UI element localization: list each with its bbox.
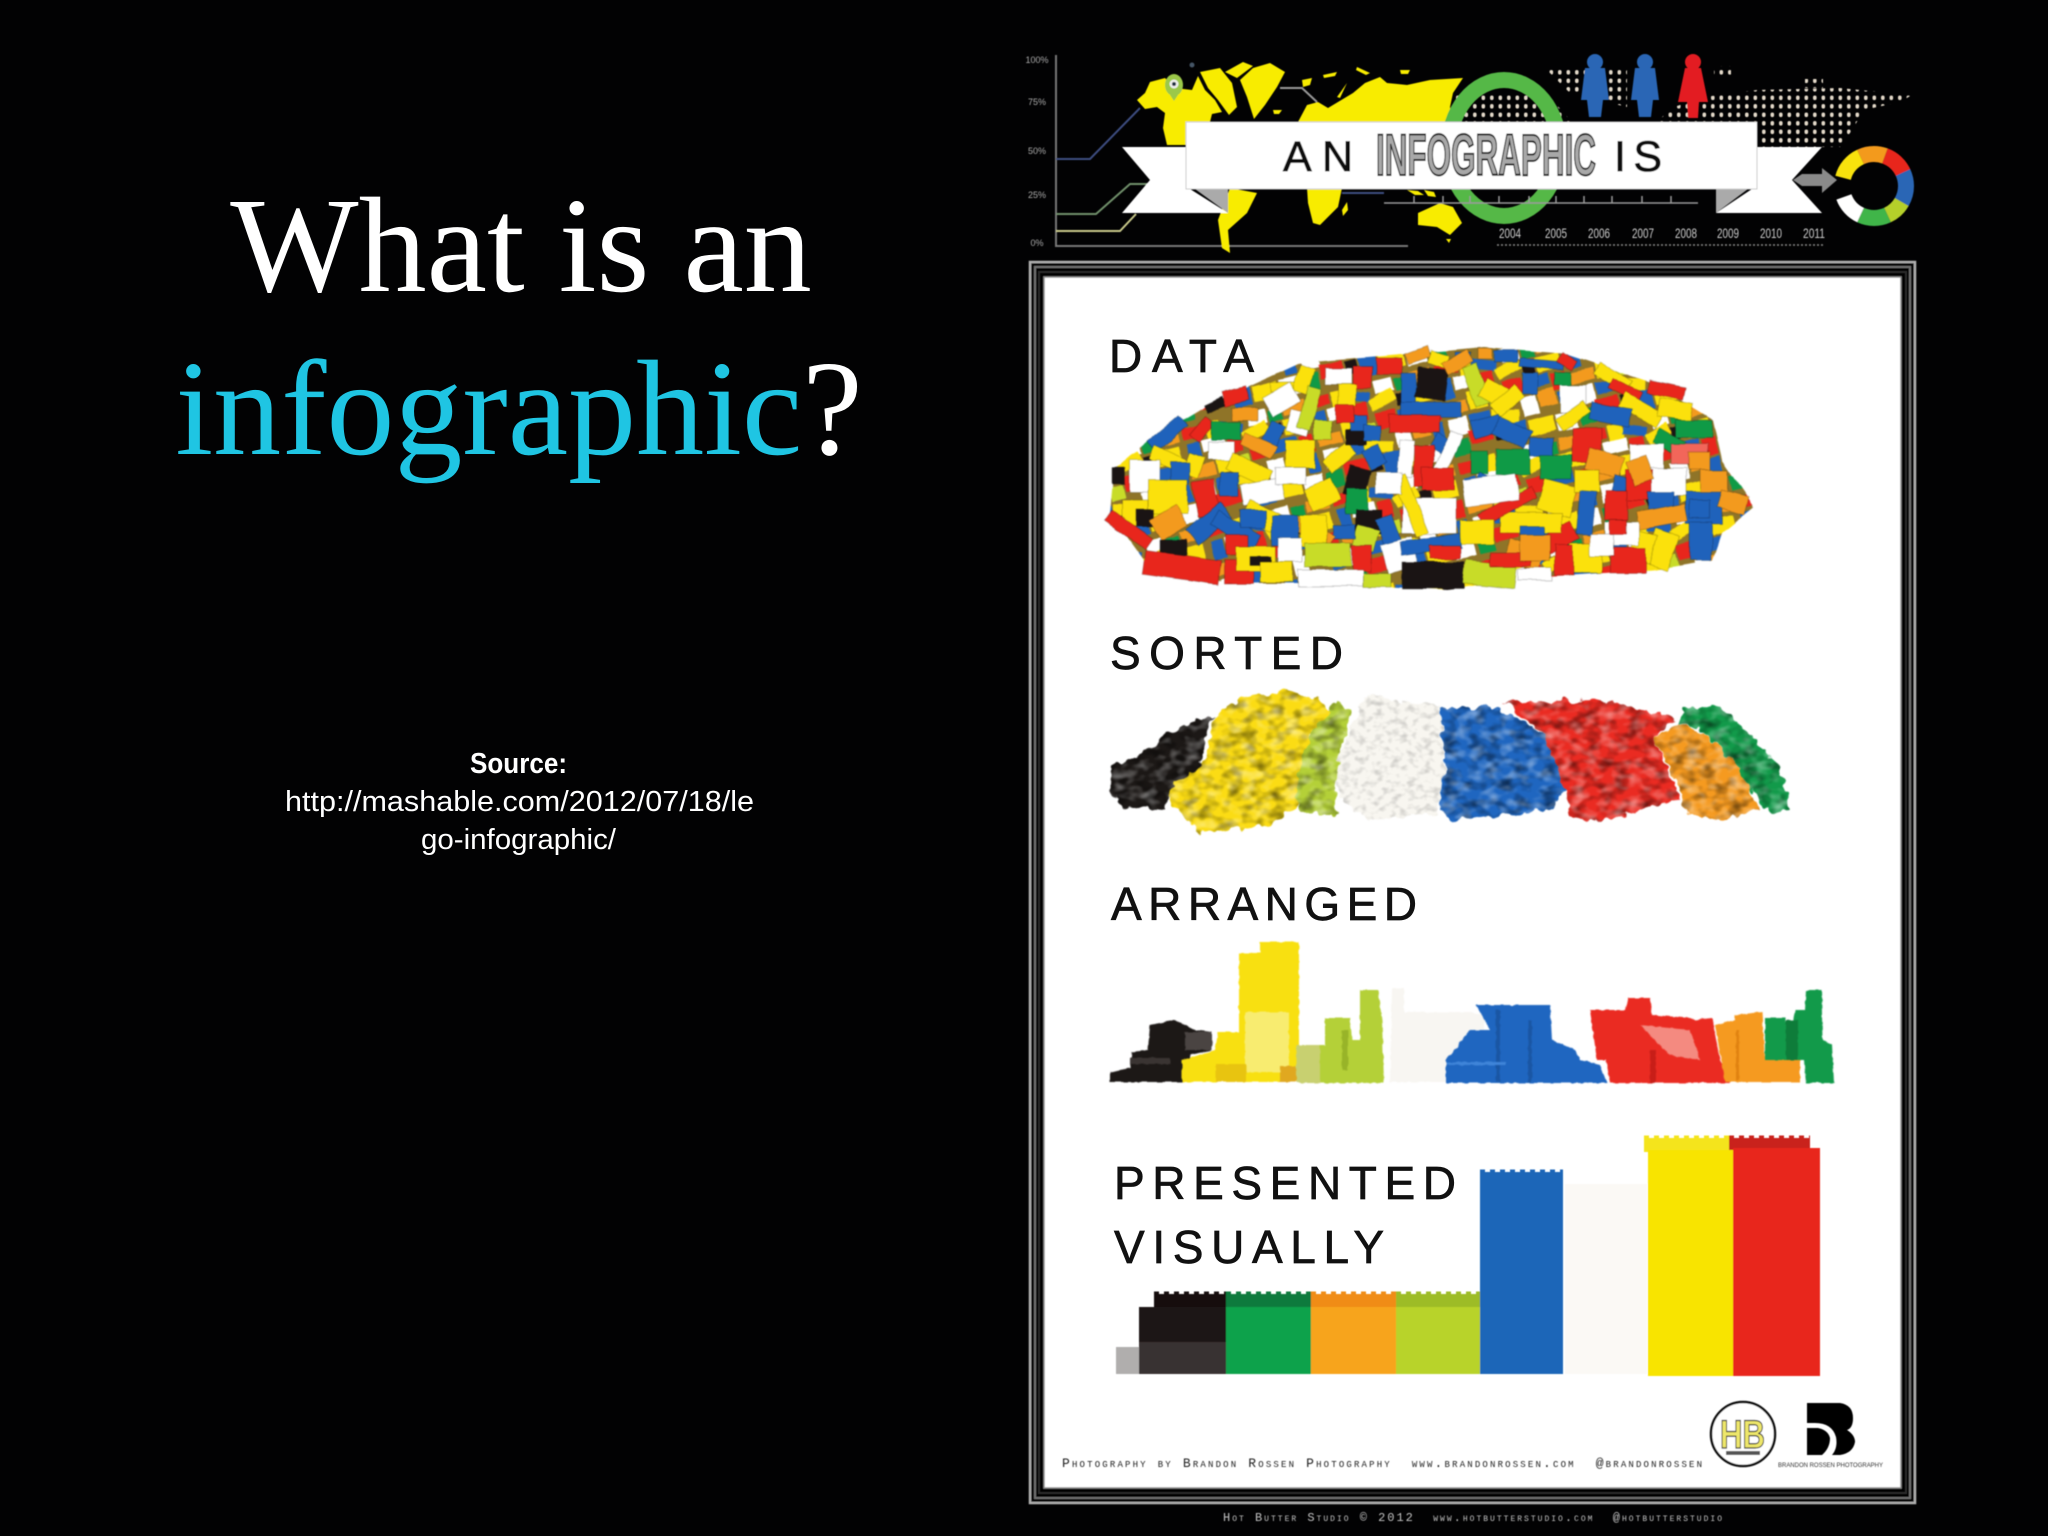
logo: BR: BRANDON ROSSEN PHOTOGRAPHY (1778, 1462, 1884, 1469)
year labels: 2009 (1717, 225, 1739, 241)
bar: lime (1396, 1293, 1480, 1374)
green blocks (1765, 990, 1834, 1083)
blue segment (1440, 708, 1565, 820)
bar: orange (1311, 1293, 1396, 1374)
year labels: 2007 (1632, 225, 1654, 241)
heading: presented visually: VISUALLY (1114, 1221, 1384, 1273)
logo: HB (1711, 1402, 1775, 1466)
logo: HB: HB (1720, 1413, 1765, 1457)
y axis labels (1025, 55, 1049, 248)
photo credit line: Photography by Brandon Rossen Photography www.brandonrossen.com @brandonrossen (1062, 1456, 1702, 1471)
banner text: AN (1283, 133, 1353, 181)
data pile of bricks (1105, 346, 1754, 590)
heading: data: DATA (1109, 330, 1254, 382)
heading: presented visually: PRESENTED (1114, 1157, 1456, 1209)
yellow segment (1165, 690, 1330, 833)
source citation: go-infographic/ (421, 824, 617, 856)
red blocks (1590, 998, 1730, 1083)
title (175, 171, 863, 484)
studio credit line: Hot Butter Studio © 2012 www.hotbutterstudio.com @hotbutterstudio (1223, 1511, 1722, 1525)
year labels (1499, 225, 1825, 241)
lime segment (1292, 700, 1351, 813)
year labels: 2011 (1803, 225, 1825, 241)
green segment (1680, 706, 1790, 812)
bar: gray (1116, 1347, 1139, 1374)
banner text: INFOGRAPHIC (1376, 123, 1596, 188)
y axis labels: 75% (1028, 97, 1046, 107)
y axis labels: 25% (1028, 190, 1046, 200)
bar: blue (1480, 1171, 1563, 1374)
source citation: http://mashable.com/2012/07/18/le (285, 786, 754, 818)
bar: green (1226, 1293, 1311, 1374)
eurasia (1298, 77, 1463, 122)
arrow (1793, 168, 1837, 193)
blue blocks (1446, 1005, 1607, 1083)
arranged brick skyline (1110, 942, 1834, 1083)
bar: black (1139, 1293, 1234, 1374)
people icons (1581, 54, 1708, 118)
y axis labels: 0% (1030, 238, 1044, 248)
lime blocks (1296, 990, 1384, 1083)
white segment (1334, 697, 1445, 820)
dotted world map (1455, 66, 1912, 147)
title: infographic? (175, 334, 863, 484)
indonesia (1407, 190, 1424, 195)
y axis labels: 100% (1025, 55, 1049, 65)
year labels: 2008 (1675, 225, 1697, 241)
orange blocks (1715, 1012, 1800, 1082)
north america (1137, 76, 1222, 145)
line chart axes and lines (1056, 55, 1408, 246)
logo: BR (1778, 1403, 1884, 1469)
australia (1418, 203, 1462, 235)
poster frame (1030, 262, 1915, 1503)
heading: presented visually (1114, 1157, 1456, 1273)
heading: arranged: ARRANGED (1111, 878, 1417, 930)
source citation: Source: (470, 748, 567, 780)
timeline (1384, 196, 1698, 203)
brick bar chart (1116, 1137, 1820, 1376)
infographic header graphic (1025, 54, 1912, 253)
year labels: 2006 (1588, 225, 1610, 241)
banner text (1283, 123, 1662, 188)
map pin icon (1165, 62, 1194, 101)
black blocks (1110, 1020, 1212, 1082)
banner ribbon (1122, 122, 1822, 213)
sorted bricks by colour (1110, 690, 1790, 833)
green ring (1449, 80, 1559, 216)
white blocks (1390, 988, 1484, 1082)
title: What is an (230, 171, 812, 321)
south america (1218, 188, 1257, 253)
africa (1307, 188, 1342, 225)
y axis labels: 50% (1028, 146, 1046, 156)
banner text: IS (1614, 133, 1662, 181)
yellow tower (1182, 942, 1312, 1082)
orange segment (1655, 722, 1760, 820)
year labels: 2005 (1545, 225, 1567, 241)
heading: sorted: SORTED (1110, 627, 1343, 679)
source citation (285, 748, 754, 856)
black segment (1110, 715, 1214, 810)
greenland (1240, 63, 1285, 119)
world map (1137, 62, 1463, 253)
bar: red (1729, 1137, 1820, 1376)
year labels: 2004 (1499, 225, 1521, 241)
year labels: 2010 (1760, 225, 1782, 241)
bar: white (1565, 1184, 1647, 1374)
donut chart (1842, 154, 1906, 218)
red segment (1503, 700, 1680, 822)
bar: yellow (1644, 1137, 1733, 1376)
